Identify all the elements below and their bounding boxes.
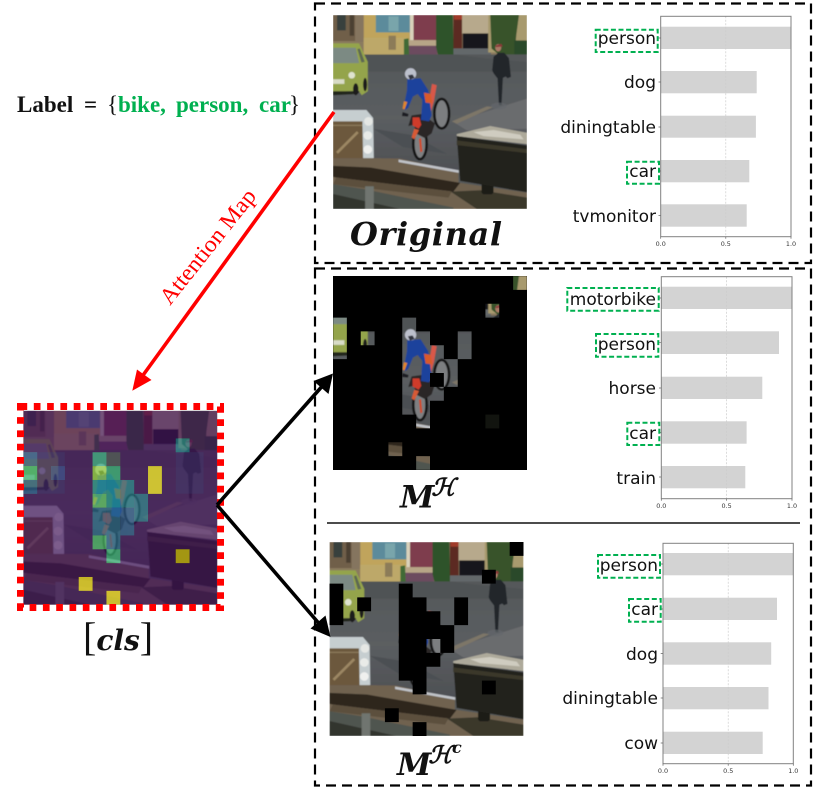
panel: original image group xyxy=(315,4,811,263)
chart: original top-5 predictions: tvmonitor xyxy=(573,207,656,227)
arrow: to high attention image xyxy=(217,374,333,505)
title: M H complement: c xyxy=(452,738,462,757)
chart: original top-5 predictions: 0.5 xyxy=(721,240,731,248)
chart: masked top-5 predictions: motorbike xyxy=(570,290,656,310)
label heading: bike, xyxy=(118,92,166,117)
chart: original top-5 predictions: car xyxy=(629,162,656,182)
chart: original top-5 predictions: person xyxy=(598,29,656,49)
chart: masked top-5 predictions: 1.0 xyxy=(787,502,797,510)
chart: masked top-5 predictions: person xyxy=(598,335,656,355)
title: M H complement: M xyxy=(397,747,431,783)
chart: masked top-5 predictions: 0.0 xyxy=(656,502,666,510)
chart: masked top-5 predictions: horse xyxy=(609,379,656,399)
chart: complement top-5 predictions: cow xyxy=(624,734,658,754)
chart: complement top-5 predictions: 0.0 xyxy=(658,767,668,775)
label heading: car xyxy=(259,92,291,117)
divider between masked panels xyxy=(327,522,800,524)
chart: complement top-5 predictions: dog xyxy=(626,645,658,665)
chart: complement top-5 predictions: diningtable xyxy=(562,689,658,709)
label: Attention Map: Attention Map xyxy=(154,184,261,309)
cls image dashed red border xyxy=(20,406,220,608)
chart: masked top-5 predictions: 0.5 xyxy=(722,502,732,510)
chart: original top-5 predictions: dog xyxy=(624,73,656,93)
chart: original top-5 predictions: 0.0 xyxy=(656,240,666,248)
chart: complement top-5 predictions: 1.0 xyxy=(788,767,798,775)
arrow: to complement image xyxy=(217,505,330,637)
chart: original top-5 predictions: diningtable xyxy=(560,118,656,138)
title: M H: M xyxy=(400,480,434,516)
label heading: { xyxy=(107,92,118,117)
chart: complement top-5 predictions xyxy=(562,543,798,775)
title: M H complement: ℋ xyxy=(428,740,456,769)
chart: masked top-5 predictions xyxy=(567,277,797,510)
chart: masked top-5 predictions: train xyxy=(616,469,656,489)
chart: complement top-5 predictions: car xyxy=(631,600,658,620)
label heading: person, xyxy=(176,92,248,117)
chart: complement top-5 predictions: 0.5 xyxy=(723,767,733,775)
panel: masked image group xyxy=(315,268,811,786)
chart: masked top-5 predictions: car xyxy=(629,424,656,444)
image: cls attention heatmap xyxy=(23,410,218,605)
label heading: Label xyxy=(17,92,73,117)
image: original photo xyxy=(333,15,527,209)
title: cls token: [cls] xyxy=(83,614,153,659)
image: high attention masked photo xyxy=(333,276,527,470)
title: Original: Original xyxy=(350,215,502,253)
title: M H: ℋ xyxy=(431,472,459,502)
label heading: } xyxy=(289,92,300,117)
chart: original top-5 predictions: 1.0 xyxy=(786,240,796,248)
image: complement masked photo xyxy=(330,542,524,736)
chart: complement top-5 predictions: person xyxy=(600,556,658,576)
label heading: = xyxy=(84,92,97,117)
arrow: attention map xyxy=(132,112,334,391)
chart: original top-5 predictions xyxy=(560,16,796,248)
